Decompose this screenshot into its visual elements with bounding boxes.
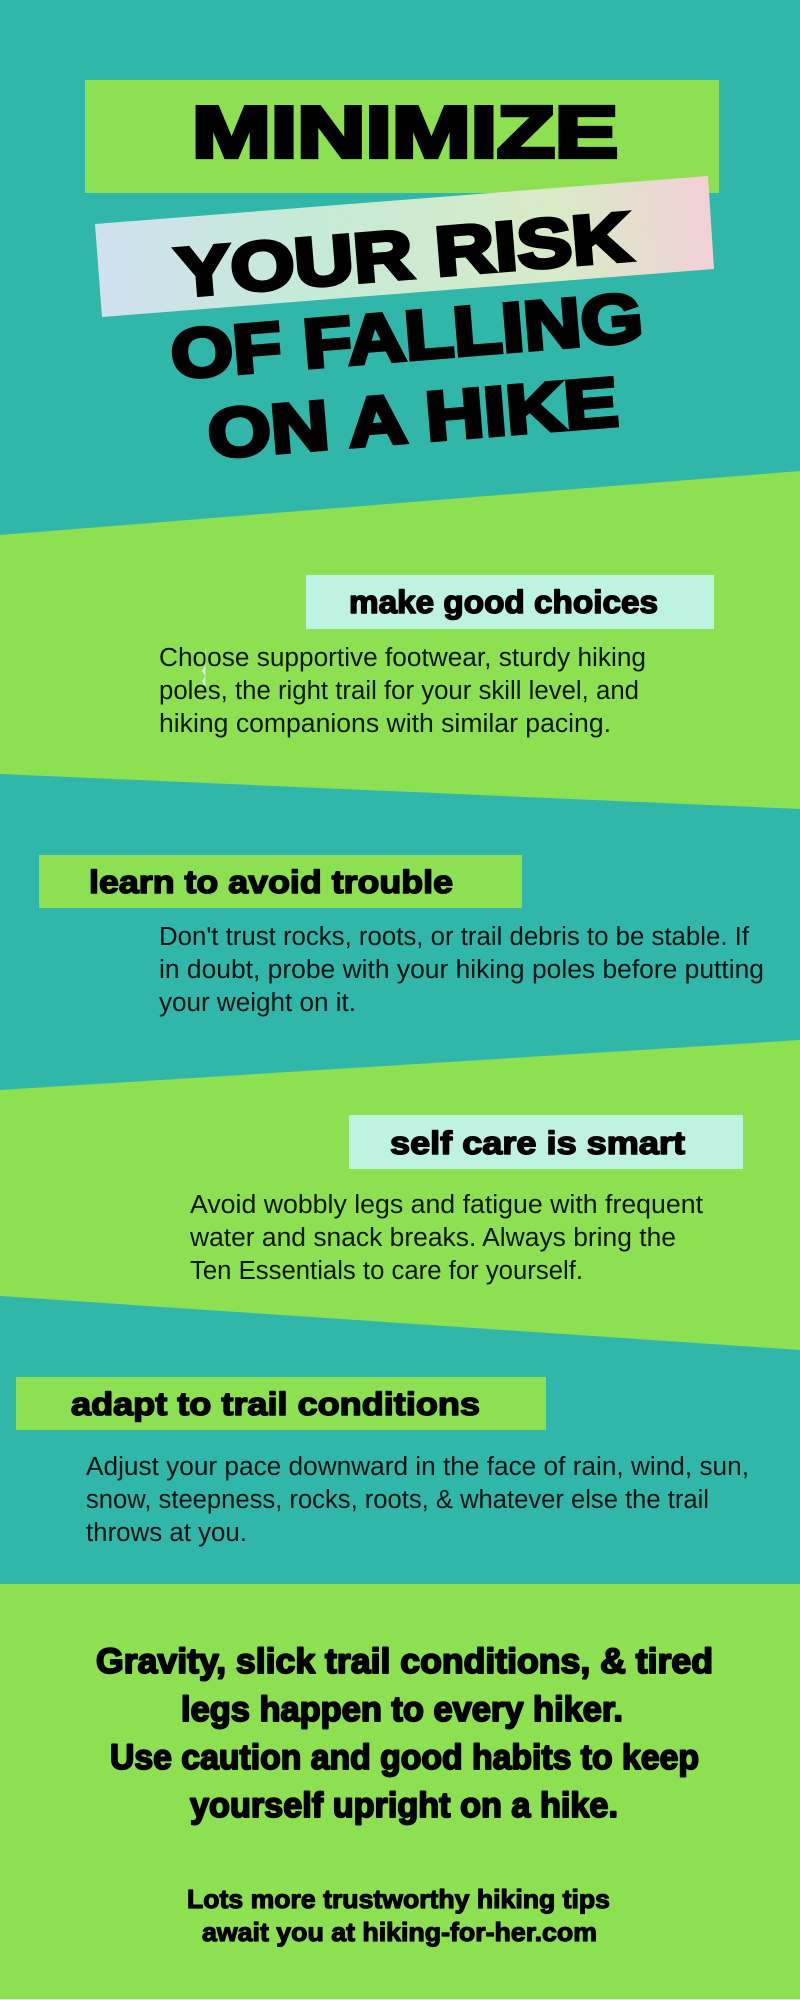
website call to action: Lots more trustworthy hiking tips [187, 1884, 610, 1914]
closing message: legs happen to every hiker. [181, 1690, 623, 1729]
heading: learn to avoid trouble [39, 855, 522, 908]
heading: adapt to trail conditions [16, 1377, 546, 1430]
closing message: Gravity, slick trail conditions, & tired [96, 1642, 713, 1681]
text: self care is smart: Avoid wobbly legs and fatigue with frequent [190, 1191, 703, 1219]
text: make good choices: hiking companions with similar pacing. [159, 710, 611, 738]
text: make good choices: Choose supportive footwear, sturdy hiking [159, 644, 646, 672]
panel: title [85, 80, 720, 473]
title banner: your risk: YOUR RISK [173, 198, 634, 311]
text: self care is smart: Ten Essentials to care for yourself. [190, 1257, 583, 1285]
title banner: minimize: MINIMIZE [192, 93, 618, 173]
website call to action: await you at hiking-for-her.com [202, 1917, 597, 1947]
text: adapt to trail conditions: snow, steepness, rocks, roots, & whatever else the trail [86, 1486, 709, 1514]
text: learn to avoid trouble: Don't trust rocks, roots, or trail debris to be stable. If [159, 923, 750, 951]
panel: footer [0, 1584, 800, 1999]
closing message: yourself upright on a hike. [190, 1786, 618, 1825]
title line: of falling: OF FALLING [168, 279, 646, 393]
heading: self care is smart [349, 1115, 743, 1169]
panel: learn to avoid trouble [39, 855, 764, 1017]
panel: adapt to trail conditions [16, 1377, 749, 1547]
text: learn to avoid trouble: your weight on it. [159, 989, 356, 1017]
heading: learn to avoid trouble: learn to avoid trouble [89, 864, 453, 900]
panel: make good choices [0, 471, 800, 809]
heading: self care is smart: self care is smart [390, 1125, 685, 1161]
title line: on a hike: ON A HIKE [205, 363, 621, 473]
text: adapt to trail conditions: throws at you. [86, 1519, 247, 1547]
text: adapt to trail conditions [86, 1453, 749, 1547]
closing message: Use caution and good habits to keep [110, 1738, 699, 1777]
text: make good choices: poles, the right trail for your skill level, and [159, 677, 639, 705]
text: adapt to trail conditions: Adjust your pace downward in the face of rain, wind, sun, [86, 1453, 749, 1481]
heading: adapt to trail conditions: adapt to trail conditions [71, 1386, 480, 1422]
text: self care is smart [189, 1191, 703, 1285]
heading: make good choices: make good choices [349, 584, 658, 620]
text: make good choices [159, 644, 646, 738]
heading: make good choices [306, 575, 714, 629]
panel: self care is smart [0, 1040, 800, 1350]
title banner: minimize [85, 80, 719, 193]
text: learn to avoid trouble: in doubt, probe with your hiking poles before putting [159, 956, 764, 984]
closing message [96, 1642, 713, 1825]
text: learn to avoid trouble [159, 923, 764, 1017]
website call to action [187, 1884, 610, 1947]
text: self care is smart: water and snack breaks. Always bring the [189, 1224, 676, 1252]
title banner: your risk [90, 170, 720, 322]
